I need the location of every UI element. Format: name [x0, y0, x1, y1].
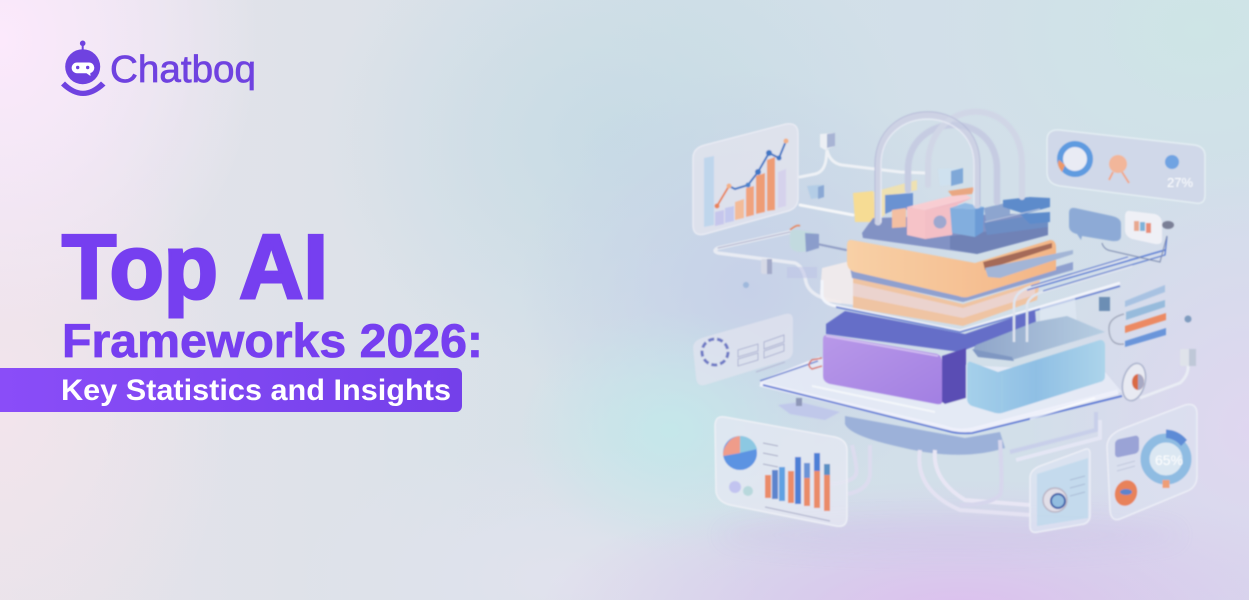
- block: layered right: [984, 197, 1050, 235]
- under-plate shadow: [845, 416, 1005, 455]
- panel: 65% gauge: [1107, 404, 1197, 520]
- floor glow: [720, 517, 1180, 553]
- subtitle ribbon: Key Statistics and Insights: [61, 374, 451, 407]
- title: Frameworks 2026: Frameworks 2026:: [62, 314, 483, 367]
- plate: slate base: [862, 213, 1048, 254]
- logo: Chatboq: [61, 40, 256, 96]
- panel: donut and 27%: 27%: [1167, 175, 1193, 190]
- panel: 65% gauge: 65%: [1155, 452, 1183, 468]
- blocks on the top plate: [885, 187, 1050, 239]
- block: blue: [967, 340, 1105, 413]
- panel: pie and bars: [715, 417, 847, 526]
- clip: [809, 358, 822, 369]
- base glass platform edges: [760, 358, 1122, 433]
- icon: capsule node: [790, 226, 819, 252]
- icon: chat bubble and tile: [1069, 208, 1174, 262]
- icon: robot head: [61, 40, 106, 96]
- base glass platform fill: [760, 358, 1122, 432]
- panel: cream layer: [820, 262, 900, 310]
- icon: top connector cube: [820, 133, 835, 150]
- panel: line and bar chart: [693, 124, 798, 235]
- illustration: AI framework stack: [693, 112, 1205, 553]
- twin vertical pipes: [1014, 258, 1132, 342]
- lower pipes: [830, 412, 1100, 515]
- block: blue front cube: [950, 203, 984, 237]
- arches: cables over blocks: [875, 112, 1022, 222]
- slate lid on blue block: [972, 316, 1105, 361]
- title: Top AI: Top AI: [62, 217, 328, 318]
- top glass tray: [822, 250, 1165, 332]
- panel: donut and 27%: [1047, 130, 1205, 203]
- wordmark: Chatboq: [110, 49, 256, 91]
- block: purple: [823, 335, 966, 404]
- block: pink with knob: [907, 193, 972, 239]
- list bars, right: [1099, 285, 1192, 347]
- subtitle ribbon: [0, 368, 462, 412]
- panel: gear card: [693, 314, 793, 385]
- icon: small blue cube: [807, 185, 824, 199]
- block: peach small: [892, 208, 906, 228]
- block: blue left: [885, 193, 913, 214]
- back glass and yellow block: [853, 168, 963, 222]
- block: orange: [847, 240, 1073, 297]
- lower tan layer: [850, 262, 1073, 326]
- panel: dial card: [1030, 449, 1090, 532]
- small bracket: [778, 398, 840, 420]
- dark purple back: [826, 310, 1036, 352]
- icon: small connectors: [743, 259, 817, 288]
- cables and nodes, upper left: [715, 150, 925, 302]
- icon: round button and connector: [1119, 349, 1196, 403]
- translucent list behind blue block: [1040, 298, 1077, 334]
